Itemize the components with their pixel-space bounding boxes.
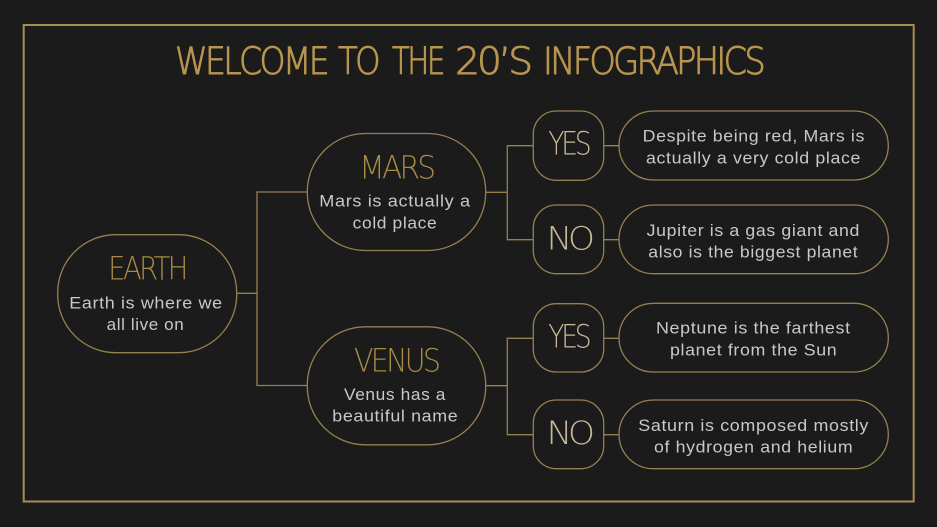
answer pill: Venus yes — [619, 303, 888, 372]
node: Venus: beautiful name — [332, 407, 458, 426]
node: Earth: all live on — [107, 315, 184, 334]
answer pill: Venus no — [619, 400, 888, 469]
title: THE — [392, 39, 443, 83]
answer pill: Mars yes: actually a very cold place — [646, 148, 861, 167]
connector: Earth to Mars and Venus — [237, 192, 307, 386]
node: Mars — [307, 134, 486, 250]
connector: Mars to Yes and No — [486, 146, 619, 240]
node: Earth — [58, 235, 237, 353]
badge: Venus yes — [533, 304, 604, 372]
answer pill: Mars yes — [619, 111, 888, 180]
title: WELCOME — [175, 39, 327, 83]
badge: Mars no: NO — [547, 219, 593, 257]
badge: Mars no — [533, 205, 604, 274]
title — [175, 39, 763, 83]
answer pill: Mars yes: Despite being red, Mars is — [643, 127, 865, 146]
title: 20’S — [455, 39, 530, 83]
badge: Mars yes: YES — [548, 124, 590, 162]
node: Venus: Venus has a — [344, 385, 446, 404]
connector: Venus to Yes and No — [486, 338, 619, 435]
node: Earth: Earth is where we — [69, 293, 223, 312]
title: TO — [338, 39, 378, 83]
node: Mars: Mars is actually a — [319, 192, 471, 211]
node: Mars: cold place — [353, 213, 437, 232]
node: Venus — [307, 327, 486, 445]
node: Mars: MARS — [359, 148, 434, 186]
answer pill: Venus no: of hydrogen and helium — [654, 438, 853, 457]
answer pill: Venus yes: planet from the Sun — [670, 340, 837, 359]
answer pill: Venus yes: Neptune is the farthest — [656, 319, 851, 338]
node: Earth: EARTH — [108, 249, 186, 287]
answer pill: Mars no: Jupiter is a gas giant and — [647, 221, 860, 240]
badge: Venus no — [533, 400, 604, 469]
node: Venus: VENUS — [354, 342, 439, 380]
title: INFOGRAPHICS — [543, 39, 763, 83]
badge: Mars yes — [533, 111, 604, 180]
badge: Venus yes: YES — [548, 317, 590, 355]
answer pill: Venus no: Saturn is composed mostly — [638, 416, 869, 435]
badge: Venus no: NO — [547, 414, 593, 452]
answer pill: Mars no — [619, 205, 888, 274]
answer pill: Mars no: also is the biggest planet — [648, 243, 858, 262]
